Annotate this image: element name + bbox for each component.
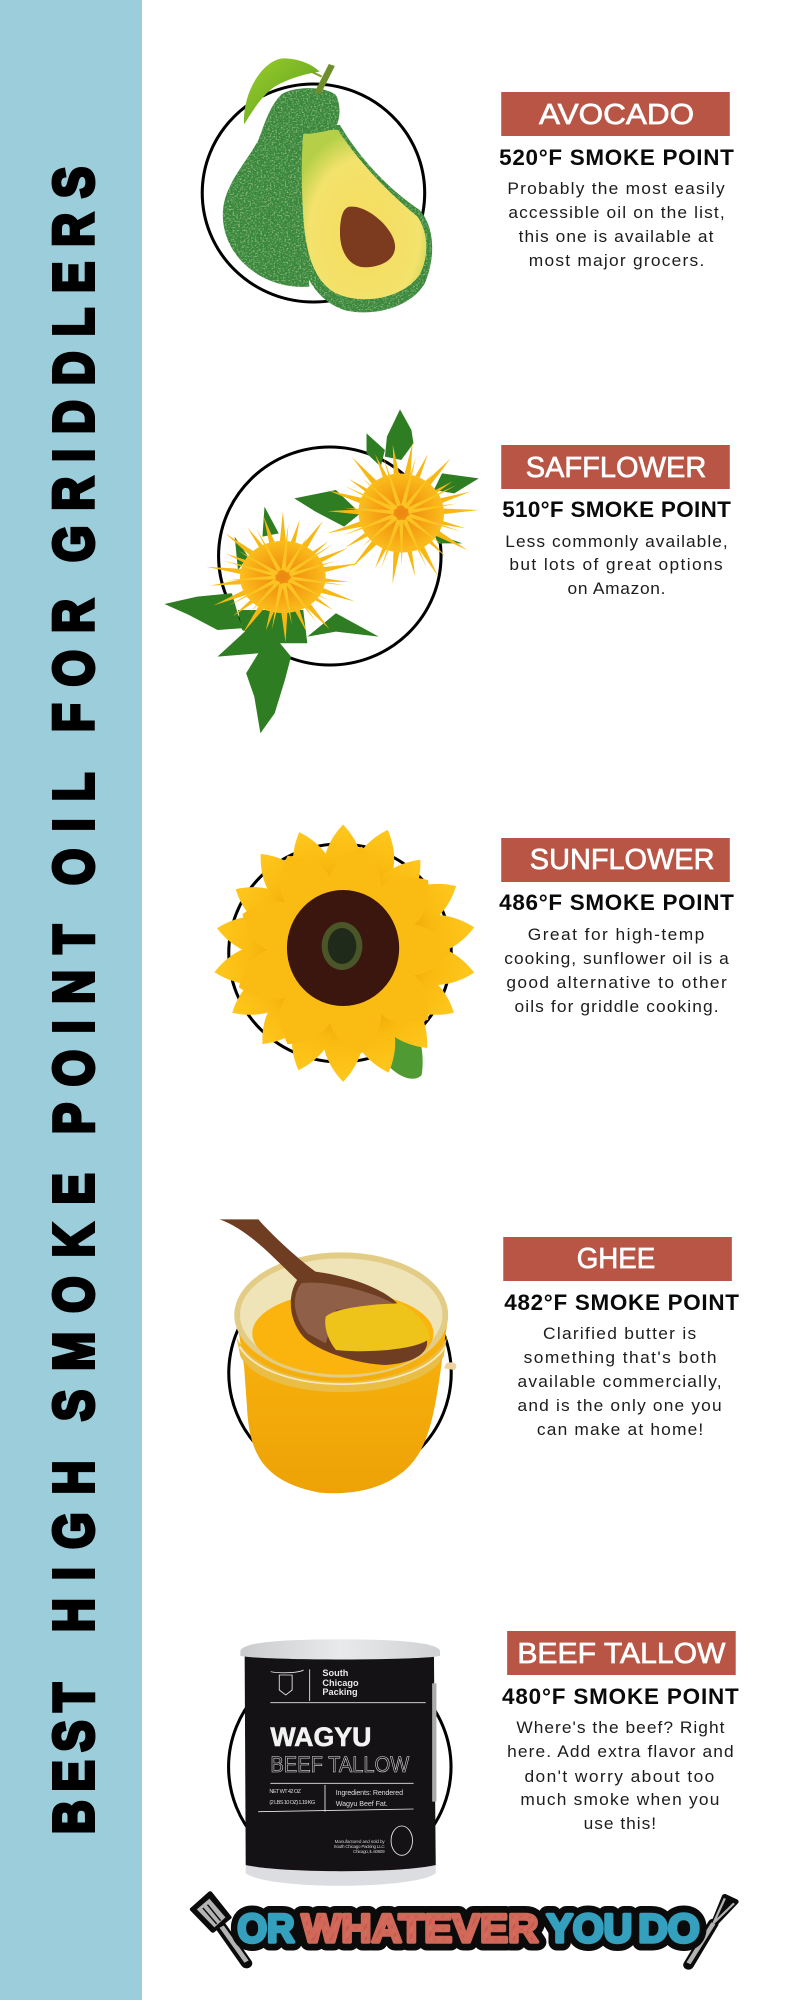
description: ghee: Clarified butter is: [543, 1323, 696, 1343]
panel: sunflower: SUNFLOWER: [530, 843, 714, 876]
title: GRIDDLERS: [43, 167, 106, 562]
icon: tallow tub: BEEF TALLOW: [270, 1752, 409, 1777]
title: BEST: [43, 1683, 106, 1834]
sidebar panel: [0, 0, 142, 2000]
icon: safflower bloom upper: [313, 431, 489, 596]
description: safflower: Less commonly available,: [505, 531, 728, 551]
description: avocado: this one is available at: [519, 226, 714, 246]
coloured lettering: OR: [237, 1905, 294, 1951]
description: beef tallow: here. Add extra flavor and: [507, 1741, 734, 1761]
label: avocado: [501, 92, 730, 136]
content column: [164, 58, 739, 1965]
ring: avocado: [202, 84, 425, 302]
icon: tallow tub: [240, 1639, 440, 1886]
icon: tallow tub: Manufactured and sold by: [335, 1839, 385, 1844]
description: beef tallow: don't worry about too: [524, 1766, 714, 1786]
label: ghee: [503, 1237, 732, 1281]
icon: safflower bloom lower: [205, 512, 360, 643]
description: safflower: [505, 531, 728, 598]
coloured lettering: YOU: [547, 1905, 632, 1951]
panel: ghee: GHEE: [577, 1242, 655, 1275]
description: safflower: on Amazon.: [568, 578, 666, 598]
ring: sunflower: [229, 844, 451, 1062]
panel: avocado: AVOCADO: [539, 98, 694, 131]
ring: safflower: [219, 447, 441, 665]
outline lettering: WHATEVER: [302, 1905, 538, 1951]
description: beef tallow: use this!: [584, 1813, 656, 1833]
description: sunflower: [504, 924, 729, 1016]
description: sunflower: oils for griddle cooking.: [514, 996, 719, 1016]
smoke point: safflower: 510°F SMOKE POINT: [502, 497, 731, 522]
icon: tallow tub: Wagyu Beef Fat.: [336, 1801, 388, 1808]
description: ghee: available commercially,: [518, 1371, 722, 1391]
description: sunflower: good alternative to other: [506, 972, 727, 992]
icon: tallow tub: South Chicago Packing LLC: [334, 1844, 385, 1849]
coloured lettering: [237, 1905, 700, 1951]
icon: spatula: [192, 1893, 247, 1963]
icon: ghee jar: [220, 1219, 456, 1493]
description: ghee: something that's both: [524, 1347, 717, 1367]
outline lettering: YOU: [547, 1905, 632, 1951]
coloured lettering: DO: [638, 1905, 700, 1951]
panel: beef tallow: [229, 1631, 739, 1886]
icon: sunflower seed disk: [287, 890, 399, 1006]
description: safflower: but lots of great options: [509, 554, 723, 574]
panel: ghee: [220, 1219, 739, 1493]
panel: avocado: [202, 58, 734, 312]
description: beef tallow: [507, 1717, 734, 1833]
title: POINT: [43, 925, 106, 1134]
label: beef tallow: [507, 1631, 736, 1675]
icon: tallow tub: NET WT 42 OZ: [269, 1789, 302, 1795]
icon: sunflower leaf: [385, 1020, 423, 1079]
panel: safflower: SAFFLOWER: [526, 451, 706, 484]
title: HIGH: [43, 1461, 106, 1632]
icon: fork: [688, 1897, 736, 1965]
description: ghee: and is the only one you: [518, 1395, 722, 1415]
title: SMOKE: [43, 1173, 106, 1421]
smoke point: avocado: 520°F SMOKE POINT: [499, 145, 734, 170]
panel: beef tallow: BEEF TALLOW: [517, 1637, 726, 1670]
label: safflower: [501, 445, 730, 489]
icon: sunflower: [211, 823, 478, 1082]
panel: safflower: [164, 409, 731, 733]
panel: sunflower: [211, 823, 734, 1082]
icon: tallow tub: Ingredients: Rendered: [336, 1790, 403, 1797]
logo: or whatever you do: [192, 1893, 736, 1965]
description: beef tallow: Where's the beef? Right: [516, 1717, 725, 1737]
outline lettering: OR: [237, 1905, 294, 1951]
coloured lettering: WHATEVER: [302, 1905, 538, 1951]
outline lettering: [237, 1905, 700, 1951]
title: FOR: [43, 599, 106, 732]
ring: ghee: [229, 1264, 451, 1482]
description: ghee: can make at home!: [537, 1419, 703, 1439]
title: OIL: [43, 773, 106, 885]
smoke point: beef tallow: 480°F SMOKE POINT: [502, 1684, 739, 1709]
ring: beef tallow: [229, 1658, 451, 1876]
description: ghee: [518, 1323, 722, 1439]
icon: tallow tub: Packing: [322, 1687, 358, 1697]
icon: tallow tub: WAGYU: [270, 1721, 371, 1752]
description: avocado: most major grocers.: [529, 250, 704, 270]
smoke point: sunflower: 486°F SMOKE POINT: [499, 890, 734, 915]
description: avocado: accessible oil on the list,: [508, 202, 725, 222]
description: sunflower: Great for high-temp: [528, 924, 704, 944]
smoke point: ghee: 482°F SMOKE POINT: [504, 1290, 739, 1315]
outline lettering: DO: [638, 1905, 700, 1951]
description: sunflower: cooking, sunflower oil is a: [504, 948, 729, 968]
title: [43, 167, 106, 1834]
icon: tallow tub: (2 LBS 10 OZ) 1.19 KG: [269, 1800, 315, 1806]
icon: tallow tub: Chicago, IL 60609: [353, 1849, 385, 1854]
icon: tallow tub: South: [322, 1668, 348, 1678]
icon: safflower leaves: [164, 409, 479, 733]
label: sunflower: [501, 838, 730, 882]
icon: tallow tub: Chicago: [322, 1678, 359, 1688]
icon: avocado: [223, 58, 432, 312]
description: beef tallow: much smoke when you: [520, 1789, 719, 1809]
description: avocado: Probably the most easily: [507, 178, 725, 198]
description: avocado: [507, 178, 725, 270]
